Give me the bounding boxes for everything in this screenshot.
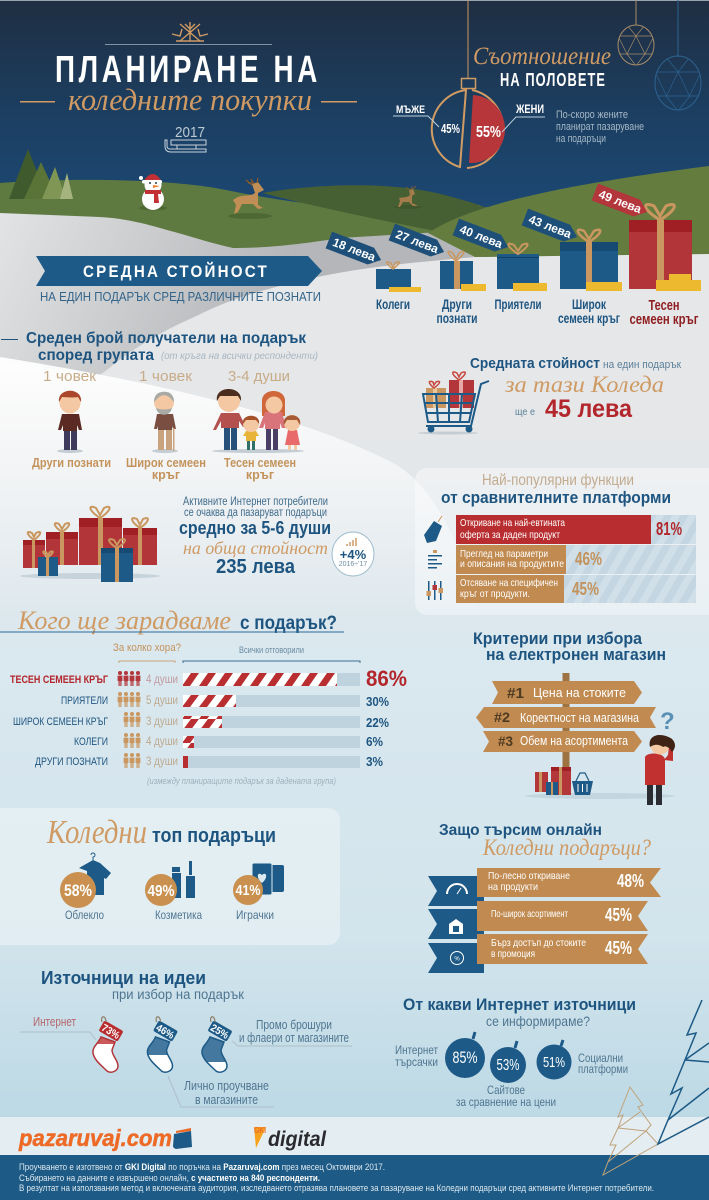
label: men: МЪЖЕ xyxy=(396,104,425,116)
person: relative xyxy=(152,392,178,453)
gift: other acquaintances: Други xyxy=(442,296,472,312)
heading xyxy=(0,606,344,635)
person group: family xyxy=(212,389,304,453)
heading: script subtitle: коледните покупки xyxy=(68,82,312,117)
section: store criteria xyxy=(473,630,675,805)
counts: 1 човек xyxy=(43,368,96,385)
signpost: #3 xyxy=(498,733,513,749)
callout: +4%: +4% xyxy=(340,547,367,562)
ribbon: easier finding xyxy=(477,868,661,897)
label: in person: Лично проучване xyxy=(184,1078,269,1093)
text: forecast: на обща стойност xyxy=(183,538,328,558)
panel: top gifts: топ подаръци xyxy=(152,825,276,847)
stocking: in store: 46% xyxy=(154,1022,177,1042)
section: recipients per group: (от кръга на всички респонденти) xyxy=(161,350,318,362)
bar: parameters xyxy=(456,545,696,574)
father xyxy=(213,389,246,450)
panel: platform features: от сравнителните платформи xyxy=(441,488,671,507)
landscape: snowy hills and trees xyxy=(0,149,709,420)
bar: cheapest offer: 81% xyxy=(656,519,682,539)
bar: filtering xyxy=(456,575,696,603)
decoration: tan christmas tree xyxy=(603,1087,658,1175)
callout: average this christmas: Средната стойност xyxy=(470,355,600,372)
section: ideas sources: при избор на подарък xyxy=(112,986,245,1002)
icon: question mark: ? xyxy=(660,708,675,735)
stocking: internet: 73% xyxy=(99,1022,122,1042)
footer text: Проучването е изготвено от GKI Digital по поръчка на Pazaruvaj.com през месец Октомври 2017. xyxy=(19,1162,385,1172)
bauble: price comparison: Сайтове xyxy=(487,1083,525,1097)
label: in person: в магазините xyxy=(195,1092,258,1107)
heading: Коледни xyxy=(46,814,147,851)
ribbon: easier finding: 48% xyxy=(617,871,644,891)
section: recipients per group xyxy=(1,330,318,482)
ribbon: quick access xyxy=(477,934,648,964)
row: friends: ПРИЯТЕЛИ xyxy=(61,695,108,707)
stocking: internet xyxy=(92,1016,123,1073)
tag xyxy=(592,184,650,220)
label: men: 45% xyxy=(441,121,460,136)
callout: average this christmas: на един подарък xyxy=(603,359,681,371)
panel: gender ratio xyxy=(393,0,701,168)
gift: cosmetics xyxy=(145,861,202,922)
text: note: планират пазаруване xyxy=(556,121,644,133)
bar: cheapest offer xyxy=(456,515,696,544)
row: other acquaintances: 3% xyxy=(366,754,383,769)
callout: +4%: 2016÷'17 xyxy=(339,561,367,568)
icon: reindeer large xyxy=(228,178,272,219)
gift: wider family: Широк xyxy=(572,296,607,312)
icon: document xyxy=(428,550,442,568)
row: friends: 5 души xyxy=(146,695,178,707)
row: other acquaintances: ДРУГИ ПОЗНАТИ xyxy=(35,756,108,768)
panel: platform features: Най-популярни функции xyxy=(482,472,634,489)
heading: planirane na: ПЛАНИРАНЕ НА xyxy=(55,49,321,91)
bauble: search engines: 85% xyxy=(452,1048,478,1067)
bauble: price comparison xyxy=(456,1041,556,1109)
tag: 27 лева xyxy=(394,227,441,256)
heading: с подарък? xyxy=(240,613,337,634)
bar: filtering: 45% xyxy=(572,579,599,599)
section: gifts total xyxy=(20,496,374,582)
gift: other acquaintances xyxy=(389,224,486,326)
counts: 3-4 души xyxy=(228,368,290,385)
section: store criteria: на електронен магазин xyxy=(486,646,666,664)
text: forecast: Активните Интернет потребители xyxy=(183,496,328,508)
section: why search online: Коледни подаръци? xyxy=(482,835,651,860)
background: night sky xyxy=(0,0,709,262)
icon: reindeer small xyxy=(394,186,422,209)
text: note: По-скоро жените xyxy=(556,109,628,121)
callout: +4% xyxy=(332,532,374,576)
gift: colleagues: Колеги xyxy=(376,296,410,312)
bauble: social platforms: платформи xyxy=(578,1062,628,1076)
icon: snowflake xyxy=(172,22,208,41)
bauble: price comparison: за сравнение на цени xyxy=(456,1095,556,1109)
section: internet sources xyxy=(395,995,636,1109)
text: note: на подаръци xyxy=(556,133,606,145)
background: lower page gradient xyxy=(0,200,709,1120)
icon: warehouse xyxy=(449,919,463,934)
footnote: (измежду планиращите подарък за дадената група) xyxy=(147,776,336,786)
signpost: Обем на асортимента xyxy=(520,734,628,748)
heading: Кого ще зарадваме xyxy=(17,606,231,635)
callout: average this christmas: ще е xyxy=(515,406,535,418)
ribbon: quick access: 45% xyxy=(605,938,632,958)
gift: clothes: Облекло xyxy=(65,908,104,922)
logo: pazaruvaj: pazaruvaj.com xyxy=(18,1125,172,1151)
labels: кръг xyxy=(152,468,180,482)
gift: wider family: семеен кръг xyxy=(558,310,620,326)
signpost xyxy=(476,673,675,799)
row: colleagues xyxy=(74,733,383,749)
label: promo: Промо брошури xyxy=(256,1017,332,1032)
tag: 43 лева xyxy=(527,212,574,241)
row: wider family xyxy=(13,712,389,730)
heading: gender: Съотношение xyxy=(473,43,611,70)
row: wider family: 3 души xyxy=(146,716,178,728)
icon: sliders xyxy=(426,581,443,600)
ribbon: wider assortment: 45% xyxy=(605,905,632,925)
footer text xyxy=(19,1162,654,1193)
logo: gki digital: GKI xyxy=(254,1126,266,1135)
section: recipients per group: според групата xyxy=(38,347,154,364)
heading: Източници на идеи xyxy=(41,968,206,988)
bauble: social platforms xyxy=(536,1040,628,1080)
bauble: price comparison: 53% xyxy=(496,1057,520,1074)
icon: promo badge xyxy=(450,952,464,964)
labels: Други познати xyxy=(32,456,111,470)
blue ribbons xyxy=(428,876,484,973)
bar: cheapest offer: оферта за даден продукт xyxy=(460,529,560,541)
heading: Среден брой получатели на подарък xyxy=(26,330,307,347)
ribbon: wider assortment: По-широк асортимент xyxy=(491,908,568,920)
gift: close family xyxy=(592,184,701,328)
bar: filtering: Отсяване на специфичен xyxy=(460,577,558,589)
ribbon: easier finding: По-лесно откриване xyxy=(488,870,570,882)
gift: friends xyxy=(453,219,547,312)
bar: parameters: и описания на продуктите xyxy=(460,558,564,570)
footer: logo band xyxy=(0,1117,709,1155)
section: who gets gifts xyxy=(0,606,407,786)
row: close family xyxy=(10,666,407,691)
gift: toys: 41% xyxy=(236,882,260,899)
stocking: flyers: 25% xyxy=(208,1022,231,1042)
row: colleagues: 6% xyxy=(366,734,383,749)
decoration: blue christmas tree xyxy=(658,1000,709,1144)
signpost: Цена на стоките xyxy=(533,685,626,700)
heading: Защо търсим онлайн xyxy=(439,822,602,839)
text: forecast: средно за 5-6 души xyxy=(179,518,331,538)
column headers: Всички отговорили xyxy=(239,645,304,655)
row: friends: 30% xyxy=(366,694,389,709)
gift: cosmetics: 49% xyxy=(148,883,174,900)
icon: sled xyxy=(165,140,206,152)
bar: cheapest offer: Откриване на най-евтината xyxy=(460,517,565,529)
banner: average value xyxy=(36,256,322,304)
label: internet xyxy=(20,1015,96,1040)
text: forecast: 235 лева xyxy=(216,556,296,578)
column headers xyxy=(113,642,360,663)
bauble: social platforms: 51% xyxy=(543,1054,565,1071)
row: friends xyxy=(61,692,389,709)
section: ideas sources xyxy=(20,968,352,1107)
stocking: flyers xyxy=(201,1016,232,1073)
signpost: Коректност на магазина xyxy=(520,711,639,725)
gift: cosmetics: Козметика xyxy=(155,908,202,922)
column headers: За колко хора? xyxy=(113,642,181,654)
icon: tan bauble xyxy=(618,0,654,66)
tag: 40 лева xyxy=(458,222,505,251)
girl xyxy=(284,415,300,450)
ribbon: wider assortment xyxy=(477,901,648,931)
bauble: search engines: търсачки xyxy=(395,1055,438,1069)
gift: friends: Приятели xyxy=(494,296,542,312)
heading: От какви Интернет източници xyxy=(403,995,636,1014)
signpost: #1 xyxy=(507,685,524,702)
text: note xyxy=(556,109,644,145)
row: wider family: 22% xyxy=(366,715,389,730)
row: close family: 86% xyxy=(366,666,407,691)
gift: clothes: 58% xyxy=(64,881,92,900)
row: other acquaintances xyxy=(35,753,383,769)
banner: average value: НА ЕДИН ПОДАРЪК СРЕД РАЗЛИЧНИТЕ ПОЗНАТИ xyxy=(40,289,321,304)
logo: gki digital: digital xyxy=(268,1128,327,1151)
panel: top gifts xyxy=(0,808,340,945)
callout: average this christmas: 45 лева xyxy=(545,395,633,423)
mother xyxy=(259,391,286,450)
row: close family: ТЕСЕН СЕМЕЕН КРЪГ xyxy=(10,674,109,686)
background: white swoosh xyxy=(0,357,480,620)
gift: close family: Тесен xyxy=(648,297,680,314)
row: colleagues: 4 души xyxy=(146,736,178,748)
label: internet: Интернет xyxy=(33,1015,76,1029)
year: 2017 xyxy=(175,124,205,141)
section: internet sources: се информираме? xyxy=(486,1013,590,1029)
labels xyxy=(32,456,296,482)
row: other acquaintances: 3 души xyxy=(146,756,178,768)
counts xyxy=(43,368,290,385)
labels: Тесен семеен xyxy=(224,456,296,470)
icon: price tag xyxy=(424,516,442,543)
gift: clothes xyxy=(60,853,111,922)
labels: Широк семеен xyxy=(126,456,206,470)
person: acquaintance xyxy=(57,391,83,453)
row: colleagues: КОЛЕГИ xyxy=(74,736,108,748)
text: forecast: се очаква да пазаруват подаръци xyxy=(184,507,327,519)
bauble: search engines: Интернет xyxy=(395,1043,438,1057)
ribbon: quick access: в промоция xyxy=(491,948,535,960)
ribbon: quick access: Бърз достъп до стоките xyxy=(491,937,586,949)
row: close family: 4 души xyxy=(146,674,178,686)
bar: parameters: 46% xyxy=(575,549,602,569)
section: why search online xyxy=(428,822,661,973)
labels: кръг xyxy=(246,468,274,482)
gift: toys: Играчки xyxy=(236,908,274,922)
person: thinking xyxy=(645,735,675,805)
icon: shopping cart xyxy=(418,372,489,434)
label: promo xyxy=(232,1017,352,1046)
icon: gauge xyxy=(447,884,467,894)
counts: 1 човек xyxy=(139,368,192,385)
title block xyxy=(20,22,357,152)
signpost: #2 xyxy=(494,709,510,725)
banner: average value: СРЕДНА СТОЙНОСТ xyxy=(83,262,269,281)
icon: gifts and basket xyxy=(535,767,593,795)
icon: fir trees xyxy=(9,149,73,199)
bar: filtering: кръг от продукти. xyxy=(460,588,530,600)
label: women xyxy=(476,102,545,141)
icon: blue bauble xyxy=(655,0,701,111)
bar: parameters: Преглед на параметри xyxy=(460,548,548,560)
row: wider family: ШИРОК СЕМЕЕН КРЪГ xyxy=(13,716,108,728)
callout: average this christmas xyxy=(418,355,681,434)
icon: gift pile xyxy=(20,507,160,582)
bauble: social platforms: Социални xyxy=(578,1051,623,1065)
gift: colleagues xyxy=(326,232,421,312)
panel: gender ratio: НА ПОЛОВЕТЕ xyxy=(500,70,606,90)
panel: platform features xyxy=(415,468,709,615)
text: forecast xyxy=(179,496,331,578)
tag: 49 лева xyxy=(597,187,644,216)
icon: promo badge: % xyxy=(454,956,460,962)
footer: text band xyxy=(0,1155,709,1200)
label: in person xyxy=(168,1076,274,1107)
gift: other acquaintances: познати xyxy=(436,310,478,326)
gift: toys xyxy=(233,863,284,922)
tag: 18 лева xyxy=(331,235,378,264)
label: women: 55% xyxy=(476,124,501,141)
ribbon: easier finding: на продукти xyxy=(488,881,538,893)
bauble: search engines xyxy=(395,1032,485,1078)
stocking: in store xyxy=(146,1016,178,1073)
chart: gifts by group xyxy=(326,184,701,328)
icon: snowman xyxy=(139,174,167,210)
callout: average this christmas: за тази Коледа xyxy=(504,372,664,397)
string and ornament xyxy=(432,0,505,168)
heading: Критерии при избора xyxy=(473,630,643,648)
footer text: Събирането на данните е извършено онлайн, с участието на 840 респонденти. xyxy=(19,1173,320,1183)
label: men xyxy=(393,104,460,136)
boy xyxy=(243,416,259,450)
gift: wider family xyxy=(522,209,622,326)
label: women: ЖЕНИ xyxy=(515,102,544,116)
label: promo: и флаери от магазините xyxy=(239,1030,349,1045)
